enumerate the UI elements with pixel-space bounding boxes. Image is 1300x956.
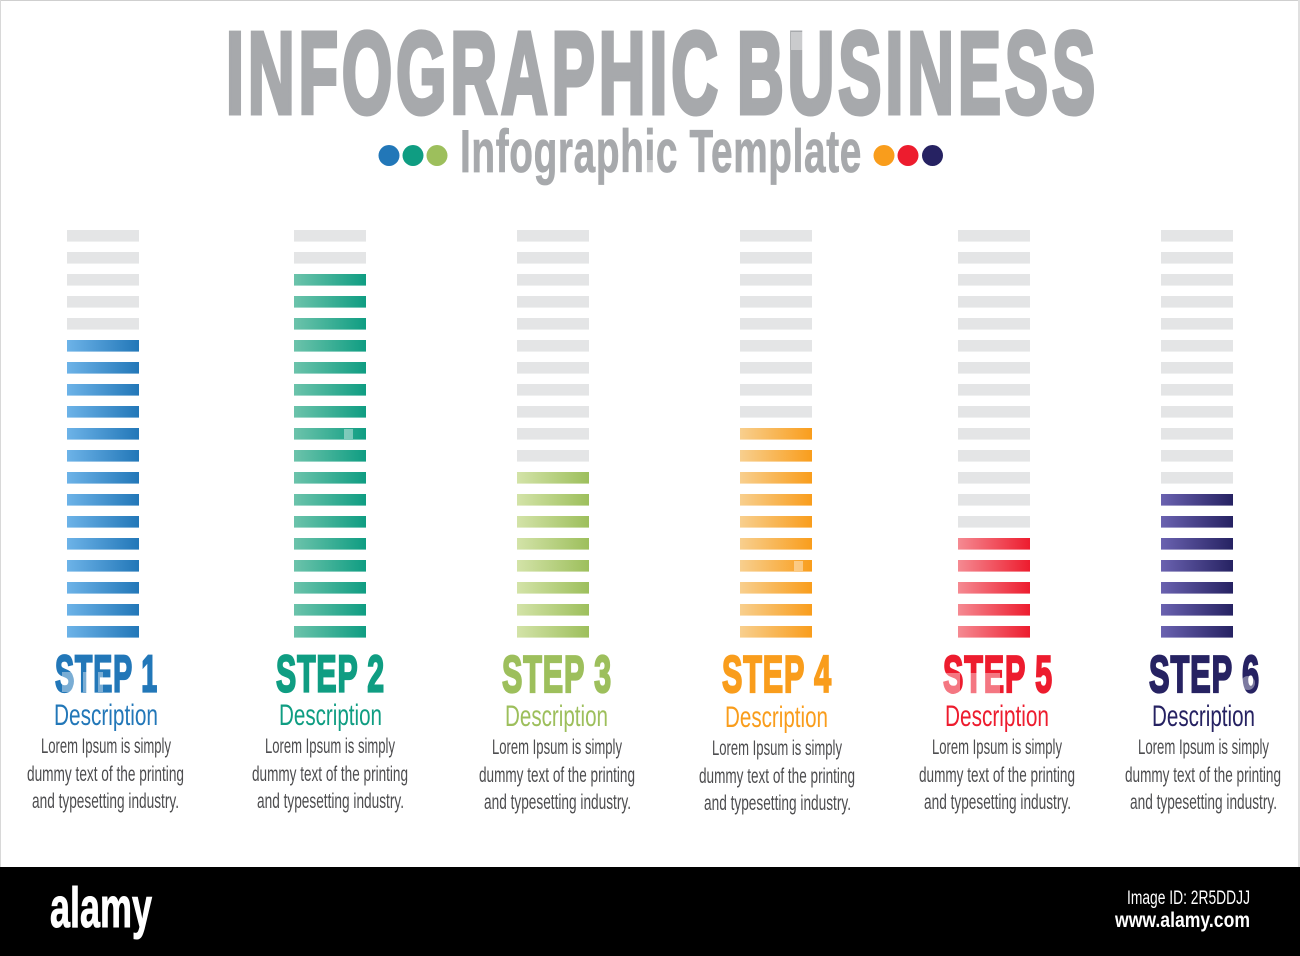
text block: step 4 bbox=[699, 736, 855, 815]
text block: step 4: and typesetting industry. bbox=[704, 791, 851, 815]
text block: step 5: and typesetting industry. bbox=[924, 790, 1071, 814]
subtitle: Infographic Template bbox=[460, 118, 862, 185]
footer bar bbox=[0, 867, 1300, 956]
text block: step 3: and typesetting industry. bbox=[484, 790, 631, 814]
text block: step 2 bbox=[252, 734, 408, 813]
heading: step 3: STEP 3 bbox=[502, 646, 612, 704]
bar meter: step 5 bbox=[958, 230, 1030, 638]
text block: step 3: Lorem Ipsum is simply bbox=[492, 735, 622, 759]
label: description 6: Description bbox=[1152, 700, 1255, 733]
heading: step 4: STEP 4 bbox=[722, 646, 832, 704]
text block: step 1 bbox=[27, 734, 184, 813]
text block: step 1: dummy text of the printing bbox=[27, 762, 184, 786]
text block: step 1: Lorem Ipsum is simply bbox=[41, 734, 171, 758]
bar meter: step 6 bbox=[1161, 230, 1233, 638]
text block: step 3: dummy text of the printing bbox=[479, 763, 635, 787]
icon: right dots bbox=[874, 145, 943, 166]
text block: step 2: Lorem Ipsum is simply bbox=[265, 734, 395, 758]
panel: step 3 bbox=[479, 230, 635, 814]
icon: left dots bbox=[378, 145, 448, 166]
heading: step 5: STEP 5 bbox=[943, 646, 1053, 704]
image id: Image ID: 2R5DDJJ bbox=[1127, 888, 1250, 909]
bar meter: step 3 bbox=[517, 230, 589, 638]
label: description 2: Description bbox=[279, 699, 382, 732]
panel: step 1 bbox=[27, 230, 184, 813]
heading: step 2: STEP 2 bbox=[276, 646, 385, 704]
panel: step 5 bbox=[919, 230, 1075, 814]
text block: step 4: dummy text of the printing bbox=[699, 764, 855, 788]
text block: step 3 bbox=[479, 735, 635, 814]
panel: step 2 bbox=[252, 230, 408, 813]
text block: step 1: and typesetting industry. bbox=[32, 789, 179, 813]
text block: step 2: and typesetting industry. bbox=[257, 789, 404, 813]
label: description 3: Description bbox=[505, 700, 608, 733]
text block: step 5: Lorem Ipsum is simply bbox=[932, 735, 1062, 759]
text block: step 4: Lorem Ipsum is simply bbox=[712, 736, 842, 760]
bar meter: step 4 bbox=[740, 230, 812, 638]
text block: step 5 bbox=[919, 735, 1075, 814]
text block: step 5: dummy text of the printing bbox=[919, 763, 1075, 787]
label: description 4: Description bbox=[725, 701, 828, 734]
panel: step 6 bbox=[1125, 230, 1281, 814]
bar meter: step 2 bbox=[294, 230, 366, 638]
label: description 5: Description bbox=[945, 700, 1049, 733]
panel: step 4 bbox=[699, 230, 855, 815]
bar meter: step 1 bbox=[67, 230, 139, 638]
text block: step 2: dummy text of the printing bbox=[252, 762, 408, 786]
heading: step 1: STEP 1 bbox=[55, 646, 158, 704]
text block: step 6 bbox=[1125, 735, 1281, 814]
footer url: www.alamy.com bbox=[1114, 909, 1250, 932]
label: description 1: Description bbox=[54, 699, 158, 732]
footer logo: alamy bbox=[50, 876, 152, 940]
